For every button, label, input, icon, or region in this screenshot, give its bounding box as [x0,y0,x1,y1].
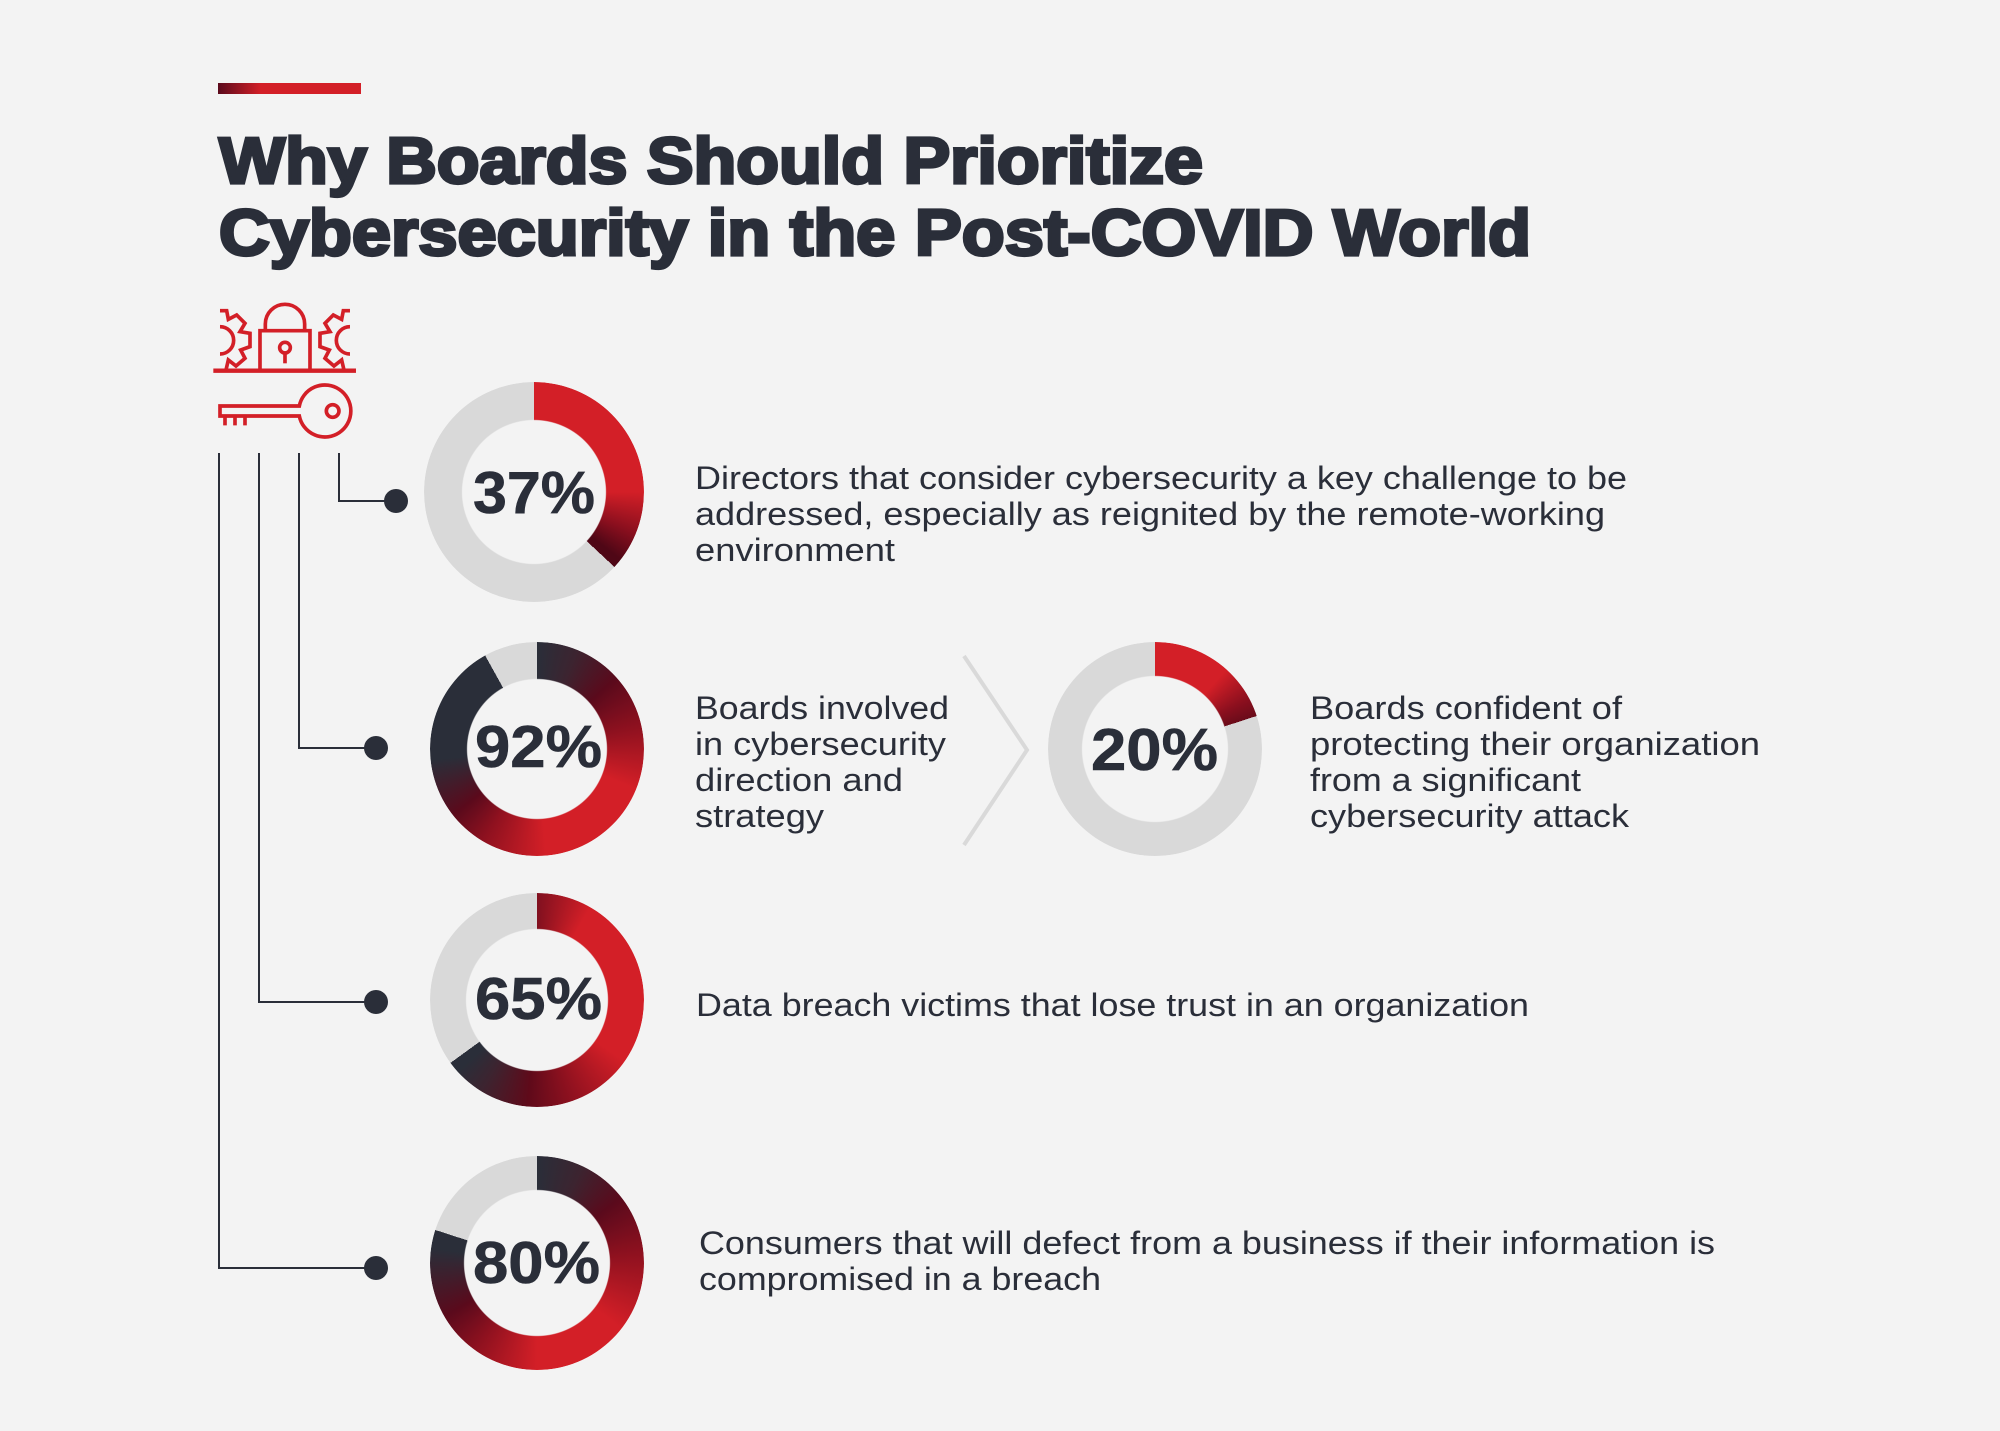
donut ring: 80% [430,1156,644,1370]
connector: 37% [339,453,408,513]
value: 37%: 37% [473,460,595,526]
text: boards involved statistic [695,690,949,834]
text: boards involved statistic: Boards involved [695,690,949,726]
text: directors statistic: addressed, especially as reignited by the remote-working [695,496,1605,532]
title [219,124,1531,269]
text: consumers statistic: compromised in a breach [699,1261,1101,1297]
text: boards involved statistic: strategy [695,798,824,834]
value: 65%: 65% [475,966,602,1032]
donut ring: 37% [424,382,644,602]
text: boards confident statistic: Boards confident of [1310,690,1622,726]
value: 20%: 20% [1091,717,1218,783]
title: Cybersecurity in the Post-COVID World [219,196,1531,269]
text: boards involved statistic: direction and [695,762,903,798]
connector: 80% [219,453,388,1280]
text: directors statistic [695,460,1627,568]
donut ring: 65% [430,893,644,1107]
text: consumers statistic [699,1225,1715,1297]
text: boards involved statistic: in cybersecurity [695,726,946,762]
connector: 92% [299,453,388,760]
text: boards confident statistic: from a significant [1310,762,1581,798]
text: directors statistic: environment [695,532,895,568]
text: data breach statistic: Data breach victims that lose trust in an organization [696,987,1529,1023]
title: Why Boards Should Prioritize [219,124,1203,197]
icon: lock, gears and key [213,304,356,437]
arrow: chevron [964,656,1027,845]
text: consumers statistic: Consumers that will defect from a business if their information is [699,1225,1715,1261]
value: 92%: 92% [475,714,602,780]
value: 80%: 80% [473,1230,600,1296]
text: boards confident statistic [1310,690,1760,834]
accent bar [218,83,361,94]
text: directors statistic: Directors that consider cybersecurity a key challenge to be [695,460,1627,496]
text: boards confident statistic: protecting their organization [1310,726,1760,762]
donut ring: 92% [430,642,644,856]
connector: 65% [259,453,388,1014]
donut ring: 20% [1048,642,1262,856]
text: boards confident statistic: cybersecurity attack [1310,798,1630,834]
